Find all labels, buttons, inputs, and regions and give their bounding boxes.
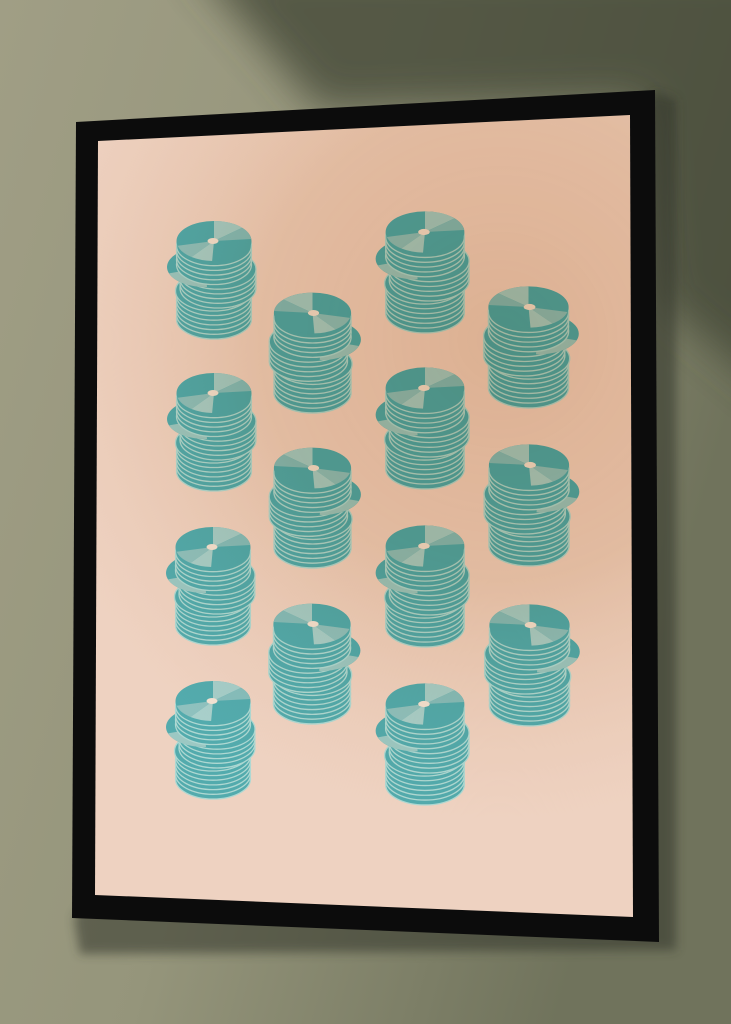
disc stack column 3, row 4: [376, 683, 469, 805]
disc stack column 4, row 1: [484, 286, 579, 408]
disc stack column 4, row 3: [485, 604, 580, 726]
poster drop shadow: [74, 92, 676, 954]
poster paper: [95, 115, 633, 917]
disc stack column 1, row 2: [167, 373, 256, 491]
disc stack column 3, row 1: [376, 211, 469, 333]
disc stack column 2, row 3: [269, 604, 360, 724]
black poster frame: [72, 90, 659, 942]
disc stack column 2, row 1: [269, 293, 361, 413]
warm light on paper: [95, 115, 633, 917]
disc stack column 3, row 3: [376, 525, 469, 647]
disc stack column 4, row 2: [484, 444, 579, 566]
poster artwork: stacks of discs: [166, 211, 580, 805]
disc stack column 2, row 2: [269, 448, 361, 568]
disc stack column 1, row 4: [166, 681, 255, 799]
disc stack column 3, row 2: [376, 367, 469, 489]
disc stack column 1, row 1: [167, 221, 256, 339]
disc stack column 1, row 3: [166, 527, 255, 645]
shadow on wall above poster: [190, 0, 731, 400]
